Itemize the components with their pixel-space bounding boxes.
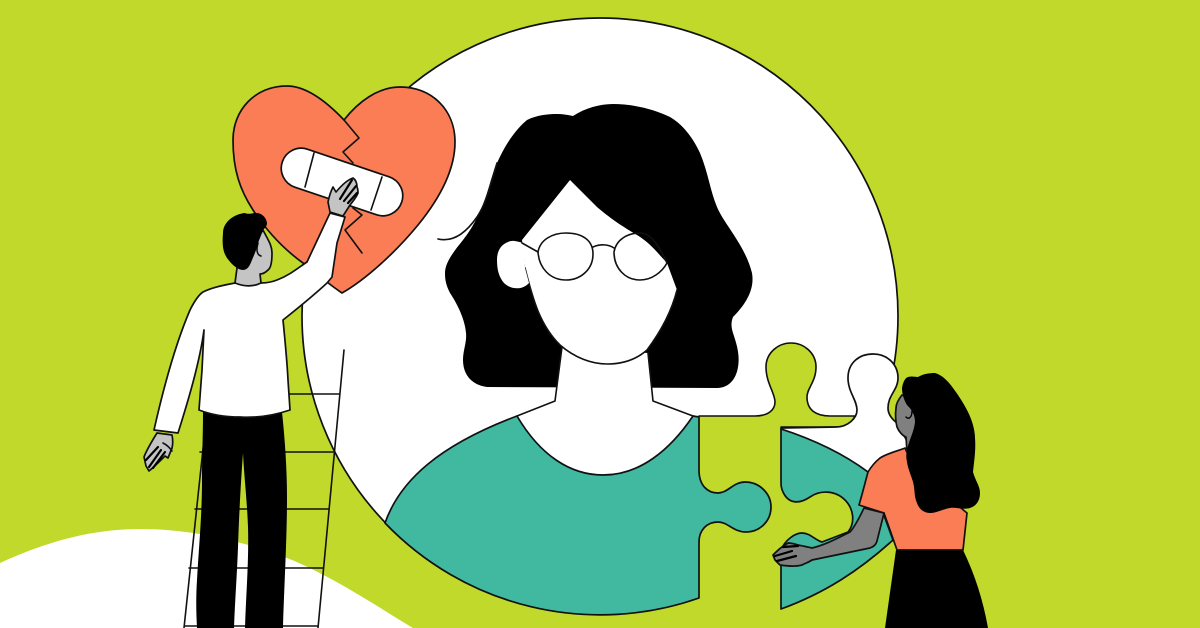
man white shirt <box>154 213 345 433</box>
man neck and face <box>235 230 272 287</box>
woman blouse <box>859 448 967 550</box>
white portrait circle <box>302 18 898 614</box>
puzzle notch fill <box>775 478 860 558</box>
woman face and neck <box>896 395 916 452</box>
portrait shirt with puzzle knob <box>385 416 771 615</box>
face chin line <box>525 268 677 364</box>
woman with puzzle piece <box>773 373 988 628</box>
man on ladder <box>144 178 358 628</box>
woman skirt <box>885 550 988 628</box>
puzzle piece: white right <box>781 354 912 472</box>
portrait neck <box>517 347 693 416</box>
bandage <box>276 143 408 221</box>
heart <box>233 86 455 293</box>
heart left half and right half <box>233 86 455 293</box>
heart crack lower <box>345 208 362 253</box>
woman ear line <box>906 411 912 418</box>
man hair <box>223 213 267 270</box>
man ear line <box>257 243 261 256</box>
puzzle gap <box>699 343 855 628</box>
woman hair <box>902 373 980 513</box>
white hill <box>0 529 413 628</box>
portrait ear <box>497 241 529 288</box>
portrait hair <box>445 104 753 388</box>
glasses <box>522 233 667 280</box>
man trousers <box>196 412 287 628</box>
man lower hand <box>144 433 173 471</box>
ladder <box>184 350 344 628</box>
woman arm and hand <box>773 508 884 566</box>
heart crack upper <box>343 120 359 163</box>
neck lines <box>517 347 693 416</box>
loose hair strand <box>438 163 497 240</box>
portrait face <box>522 180 677 364</box>
man raised hand <box>328 178 358 216</box>
puzzle piece: teal right <box>781 429 893 609</box>
